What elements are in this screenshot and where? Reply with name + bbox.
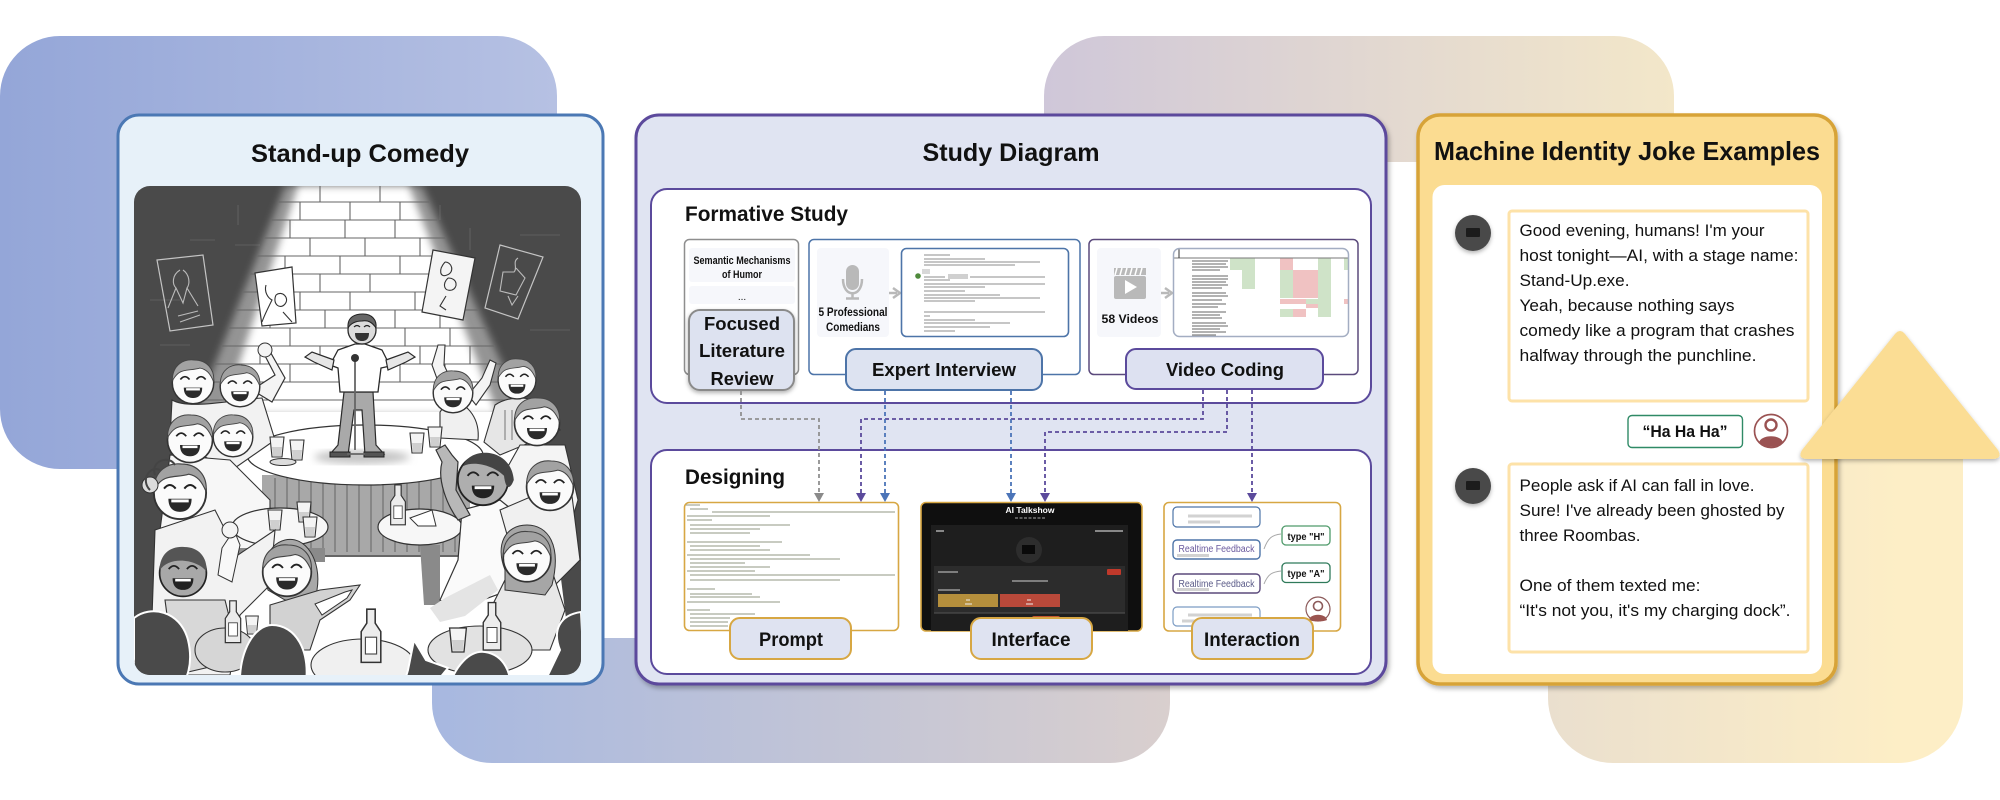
chat bubble 1 bbox=[1173, 507, 1260, 527]
transcript screenshot bbox=[902, 248, 1068, 336]
joke bubble 2: Sure! I've already been ghosted by bbox=[1520, 502, 1785, 520]
front tables bbox=[194, 600, 532, 675]
text: ellipsis: ... bbox=[738, 292, 746, 303]
arrow: video coding to interface bbox=[1040, 390, 1227, 502]
icon: user bbox=[1306, 597, 1330, 622]
label: focused literature review: Literature bbox=[699, 340, 785, 361]
card: interface bbox=[921, 502, 1142, 659]
heading: stand-up comedy: Stand-up Comedy bbox=[251, 140, 469, 168]
tag: type h bbox=[1282, 526, 1330, 545]
arrow head: upward yellow arrow bbox=[1800, 331, 2000, 459]
joke bubble 1: Yeah, because nothing says bbox=[1520, 297, 1734, 315]
mid tables with glasses bbox=[232, 427, 462, 605]
arrow: videos to table bbox=[1161, 288, 1172, 298]
chat bubble 2: Realtime Feedback bbox=[1178, 544, 1255, 555]
arrow: expert interview to interface bbox=[1006, 391, 1016, 502]
card: video coding bbox=[1089, 240, 1358, 389]
label: focused literature review bbox=[689, 310, 794, 390]
panel: stand-up comedy bbox=[118, 115, 603, 691]
text: of humor: of Humor bbox=[722, 269, 763, 281]
text: ai talkshow: AI Talkshow bbox=[1006, 505, 1055, 515]
connector: type a bbox=[1264, 571, 1281, 584]
chat bubble 2 bbox=[1173, 540, 1260, 559]
arrow: expert interview to prompt bbox=[880, 391, 890, 502]
text: 5 professional comedians bbox=[818, 307, 888, 334]
chat bubble 3: Realtime Feedback bbox=[1178, 579, 1255, 590]
foreground silhouettes bbox=[134, 610, 581, 675]
card: interaction bbox=[1164, 502, 1340, 659]
icon: ai avatar 1 bbox=[1455, 215, 1491, 251]
label: expert interview: Expert Interview bbox=[872, 359, 1017, 380]
reaction: ha ha ha: “Ha Ha Ha” bbox=[1642, 422, 1728, 441]
label: video coding: Video Coding bbox=[1166, 359, 1284, 380]
label: interface bbox=[971, 618, 1092, 659]
joke bubble 2 bbox=[1509, 464, 1808, 652]
text: literature title: Semantic Mechanisms bbox=[694, 255, 790, 267]
label: prompt: Prompt bbox=[759, 630, 824, 651]
heading: study diagram: Study Diagram bbox=[922, 139, 1100, 167]
card: focused literature review bbox=[684, 240, 798, 390]
label: interaction: Interaction bbox=[1204, 630, 1300, 651]
stage top bbox=[247, 425, 483, 485]
panel: machine identity joke examples bbox=[1418, 115, 1836, 684]
background ribbon: mauve to sand top band bbox=[1044, 36, 1674, 162]
panel: formative study bbox=[651, 189, 1371, 403]
label: interaction bbox=[1192, 618, 1313, 659]
label: focused literature review: Focused bbox=[704, 313, 780, 334]
label: interface: Interface bbox=[992, 630, 1070, 651]
joke bubble 1: halfway through the punchline. bbox=[1520, 347, 1756, 365]
label: expert interview bbox=[846, 349, 1042, 390]
background ribbon: blue upper left bbox=[0, 36, 557, 469]
tag: type a bbox=[1282, 563, 1330, 582]
right front crowd bbox=[430, 445, 580, 650]
arrow: video coding to prompt bbox=[856, 390, 1203, 502]
joke bubble 2: One of them texted me: bbox=[1520, 577, 1700, 595]
joke bubble 1: comedy like a program that crashes bbox=[1520, 322, 1794, 340]
tag: type h: type "H" bbox=[1288, 531, 1325, 543]
tag: type a: type "A" bbox=[1288, 568, 1325, 580]
text: 58 videos: 58 Videos bbox=[1102, 312, 1159, 326]
card: expert interview bbox=[809, 240, 1080, 390]
video coding table bbox=[1174, 248, 1349, 336]
icon: microphone bbox=[843, 265, 862, 298]
chat bubble 3 bbox=[1173, 574, 1260, 593]
reaction: ha ha ha bbox=[1628, 416, 1742, 448]
joke bubble 1: Good evening, humans! I'm your bbox=[1520, 222, 1765, 240]
label: video coding bbox=[1126, 349, 1323, 389]
heading: designing: Designing bbox=[685, 466, 785, 489]
icon: clapperboard bbox=[1114, 268, 1146, 299]
left front crowd bbox=[142, 460, 360, 675]
joke bubble 1: host tonight—AI, with a stage name: bbox=[1520, 247, 1798, 265]
label: prompt bbox=[730, 618, 851, 659]
joke bubble 2: People ask if AI can fall in love. bbox=[1520, 477, 1754, 495]
connector: type h bbox=[1264, 534, 1281, 549]
comedian bbox=[305, 314, 415, 457]
panel: designing bbox=[651, 450, 1371, 674]
background ribbon: cream arrow stem bbox=[1548, 440, 1963, 763]
chat bubble 4 bbox=[1173, 607, 1260, 626]
background ribbon: blue to sand bottom band bbox=[432, 638, 1170, 763]
icon: ai avatar 2 bbox=[1455, 468, 1491, 504]
back crowd left bbox=[160, 342, 286, 528]
heading: machine identity joke examples: Machine Identity Joke Examples bbox=[1434, 136, 1820, 166]
text: 5 professional comedians: 5 Professional bbox=[818, 307, 888, 319]
label: focused literature review: Review bbox=[710, 368, 774, 389]
card: prompt bbox=[684, 502, 898, 659]
icon: audience user bbox=[1754, 414, 1788, 448]
joke bubble 1: Stand-Up.exe. bbox=[1520, 272, 1630, 290]
panel: study diagram bbox=[636, 115, 1386, 684]
arrow: literature review to prompt bbox=[741, 391, 824, 502]
back crowd right bbox=[431, 344, 578, 512]
heading: formative study: Formative Study bbox=[685, 203, 848, 226]
joke bubble 1 bbox=[1509, 211, 1808, 401]
arrow: mic to transcript bbox=[889, 288, 900, 298]
text: 5 professional comedians: Comedians bbox=[826, 322, 880, 334]
joke bubble 2: three Roombas. bbox=[1520, 527, 1640, 545]
stage front bbox=[262, 475, 470, 555]
illustration: comedian performing to a laughing crowd bbox=[134, 186, 585, 691]
joke bubble 2: “It's not you, it's my charging dock”. bbox=[1520, 602, 1790, 620]
arrow: video coding to interaction bbox=[1247, 390, 1257, 502]
